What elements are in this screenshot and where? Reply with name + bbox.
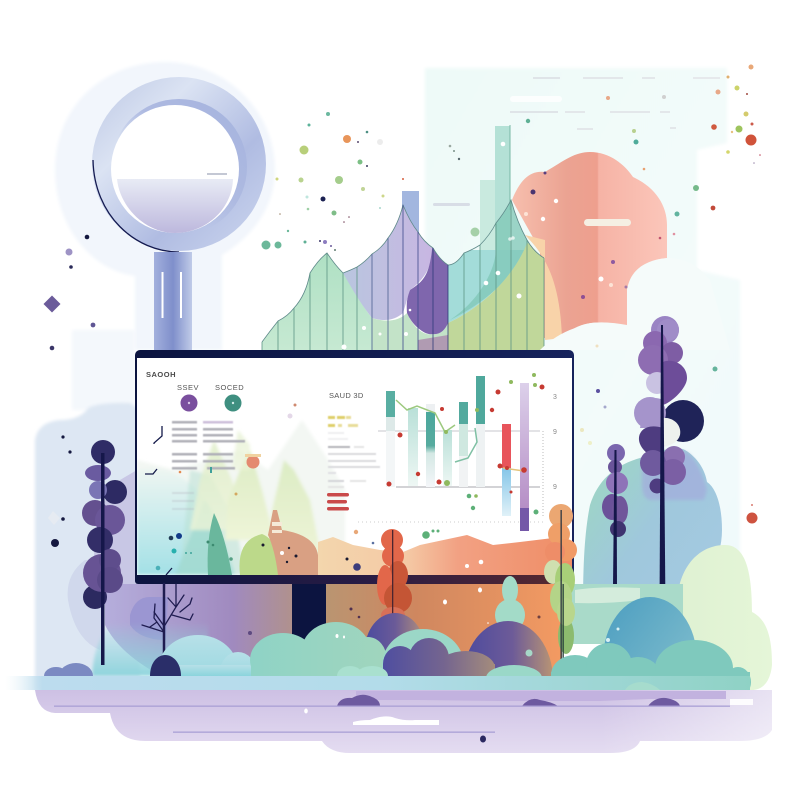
area: pale violet [344,208,432,320]
icon: teal metric circle [224,394,242,412]
panel: hill behind right trees [583,448,722,610]
bare tree [142,584,193,655]
icon: screen squiggles [145,426,172,575]
bush: teal right [551,640,751,688]
dots: scattered confetti [44,64,761,547]
magnifier halo [55,62,275,350]
axis labels: 9 [553,429,557,436]
bush: teal big [250,622,386,676]
magnifier lens [111,105,239,233]
bush: purple brown [383,638,495,676]
cyan haze [92,622,208,676]
tree: left purple [82,440,127,665]
text block: middle notes [328,416,380,488]
chart highlights [342,142,522,350]
area: teal [448,250,524,323]
bush: teal mid [382,629,461,668]
tree: orange right [544,504,577,660]
red legend bars [327,493,349,510]
label: right metric: SOCED [215,383,244,392]
trend line [396,400,455,432]
axis labels [553,394,557,491]
shore lines [54,706,730,707]
monitor screen [135,350,574,584]
bush: small teal [486,665,542,676]
bush: light green right [677,545,772,690]
tree: green pale centre [495,576,525,631]
small dots below monitor [248,588,540,635]
monitor stand [292,584,326,654]
bushes: foreground [44,584,751,688]
area: olive [448,243,550,350]
magnifier handle [154,252,192,352]
magnifier ring [92,77,266,251]
label: left metric: SSEV [177,383,199,392]
screen dots [156,404,348,570]
ground: lavender shore [35,690,775,755]
area: dark violet [407,240,448,334]
bar 5 [459,402,468,487]
panel: pale left background [35,330,140,690]
screen highlights [465,560,483,568]
bush: cyan [162,635,251,676]
axis labels: 9 [553,484,557,491]
icon: magnifying glass [55,62,275,352]
white patches [730,699,753,705]
area: base green [262,254,372,350]
panel: salmon cloud [512,152,667,340]
bar 1 [386,391,395,487]
icon: diamond [44,296,60,312]
chart outline [262,200,544,342]
screen landscape [137,420,572,575]
bar 2 [408,408,418,486]
monitor bottom bezel [135,575,574,584]
trunk [660,325,666,610]
white flecks on bush [336,634,345,638]
bush: pale teal small [337,666,388,676]
lens crescent [111,99,247,235]
icon: purple metric circle [180,394,198,412]
tree: small purple right [602,444,628,586]
heading: chart title: SAUD 3D [329,391,364,400]
purple stones [337,695,680,706]
chart dots [353,373,544,571]
panel: area below monitor [92,584,683,678]
chart vertical bars [262,200,544,350]
dark pebble [480,736,486,742]
background panel: pale mint [425,68,740,610]
dome: blue [603,597,697,723]
bush: dark tear [150,655,181,676]
cloud: white cloud under salmon shape [540,258,730,350]
monitor frame [135,350,574,584]
axis labels: 3 [553,394,557,401]
dome: purple big [468,621,552,676]
text block: left paragraphs [172,421,245,510]
chart: background bars [402,125,510,280]
heading: screen title: SAOOH [146,370,176,379]
tree: tall purple right [634,316,707,610]
chart: mountain area chart [262,142,550,350]
bar 6 [476,376,485,487]
area: light green lower [372,313,448,350]
bar 7 [502,424,511,516]
chart: screen bar chart [353,373,557,571]
bar 3 [426,404,435,487]
bar 8 [520,383,529,531]
dome: purple back [367,613,420,651]
tree: orange center [377,529,412,623]
trunk: green right [562,584,564,662]
bush: periwinkle small [44,663,93,676]
ground: water band [5,676,750,690]
area: teal dark band [450,195,530,320]
screen background [137,358,572,575]
bar 4 [443,430,452,486]
axis lines [358,431,545,522]
